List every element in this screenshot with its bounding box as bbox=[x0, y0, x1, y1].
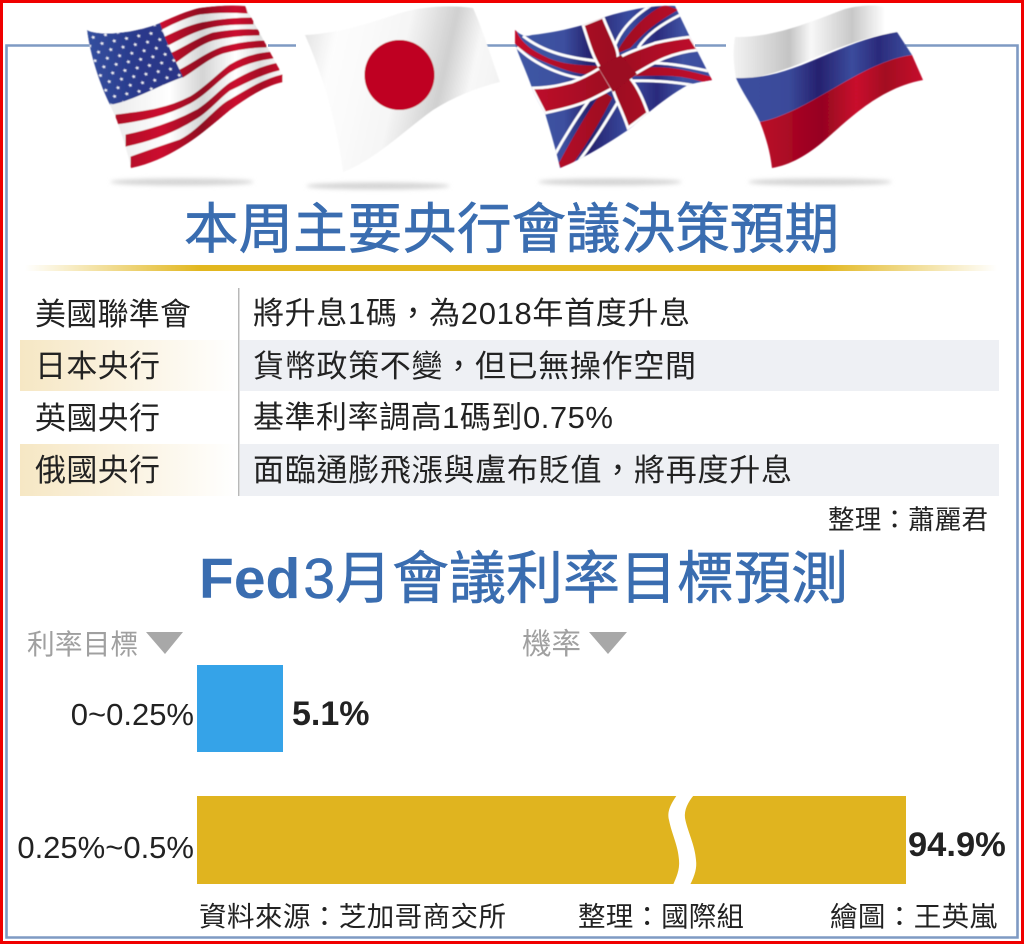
bar: 0~0.25%: 5.1% bbox=[292, 695, 370, 733]
icon: Russia flag bbox=[734, 6, 923, 168]
column header: probability: 機率 bbox=[522, 628, 581, 661]
diagonal white edges bbox=[517, 6, 708, 167]
footer: source and credits: 資料來源：芝加哥商交所 bbox=[199, 901, 506, 932]
icon: United Kingdom flag bbox=[510, 0, 715, 172]
column header: probability bbox=[522, 628, 627, 661]
table: central bank expectations bbox=[20, 288, 999, 496]
title: Fed March rate forecast: Fed3月會議利率目標預測 bbox=[199, 547, 848, 611]
row: Federal Reserve bbox=[35, 296, 690, 332]
row: Bank of Russia: 俄國央行 bbox=[35, 453, 160, 488]
flag shadows bbox=[110, 178, 892, 190]
row: Bank of England: 基準利率調高1碼到0.75% bbox=[253, 400, 613, 435]
bar: 0.25%~0.5% bbox=[17, 795, 1006, 885]
bar: 0~0.25% bbox=[71, 665, 370, 752]
row: Federal Reserve: 將升息1碼，為2018年首度升息 bbox=[253, 296, 690, 331]
credit: table editor: 整理：蕭麗君 bbox=[828, 505, 988, 535]
bar: 0~0.25%: 0~0.25% bbox=[71, 697, 194, 732]
icon: United States flag bbox=[86, 4, 284, 169]
row: Bank of Japan: 貨幣政策不變，但已無操作空間 bbox=[253, 349, 696, 384]
row: Bank of England bbox=[35, 400, 613, 436]
row: Bank of Russia: 面臨通膨飛漲與盧布貶值，將再度升息 bbox=[253, 453, 792, 488]
row: Federal Reserve: 美國聯準會 bbox=[35, 297, 191, 332]
cross bbox=[532, 37, 698, 113]
icon: Japan flag bbox=[305, 6, 500, 172]
diagonal red bands bbox=[515, 6, 712, 169]
title: central bank decisions: 本周主要央行會議決策預期 bbox=[184, 199, 839, 260]
row: Bank of Japan: 日本央行 bbox=[35, 349, 160, 384]
row backgrounds bbox=[20, 340, 999, 496]
bar: 0.25%~0.5%: 0.25%~0.5% bbox=[17, 830, 194, 865]
row: Bank of England: 英國央行 bbox=[35, 401, 160, 436]
row: Bank of Japan bbox=[35, 349, 696, 384]
gold divider line bbox=[25, 265, 997, 271]
footer: source and credits: 繪圖：王英嵐 bbox=[830, 901, 998, 932]
footer: source and credits: 整理：國際組 bbox=[578, 901, 744, 932]
bar: 0.25%~0.5%: 94.9% bbox=[908, 826, 1006, 864]
bar chart: rate target probability bbox=[17, 665, 1006, 885]
column header: rate target: 利率目標 bbox=[27, 629, 138, 660]
footer: source and credits bbox=[199, 901, 998, 932]
column divider bbox=[238, 288, 240, 496]
